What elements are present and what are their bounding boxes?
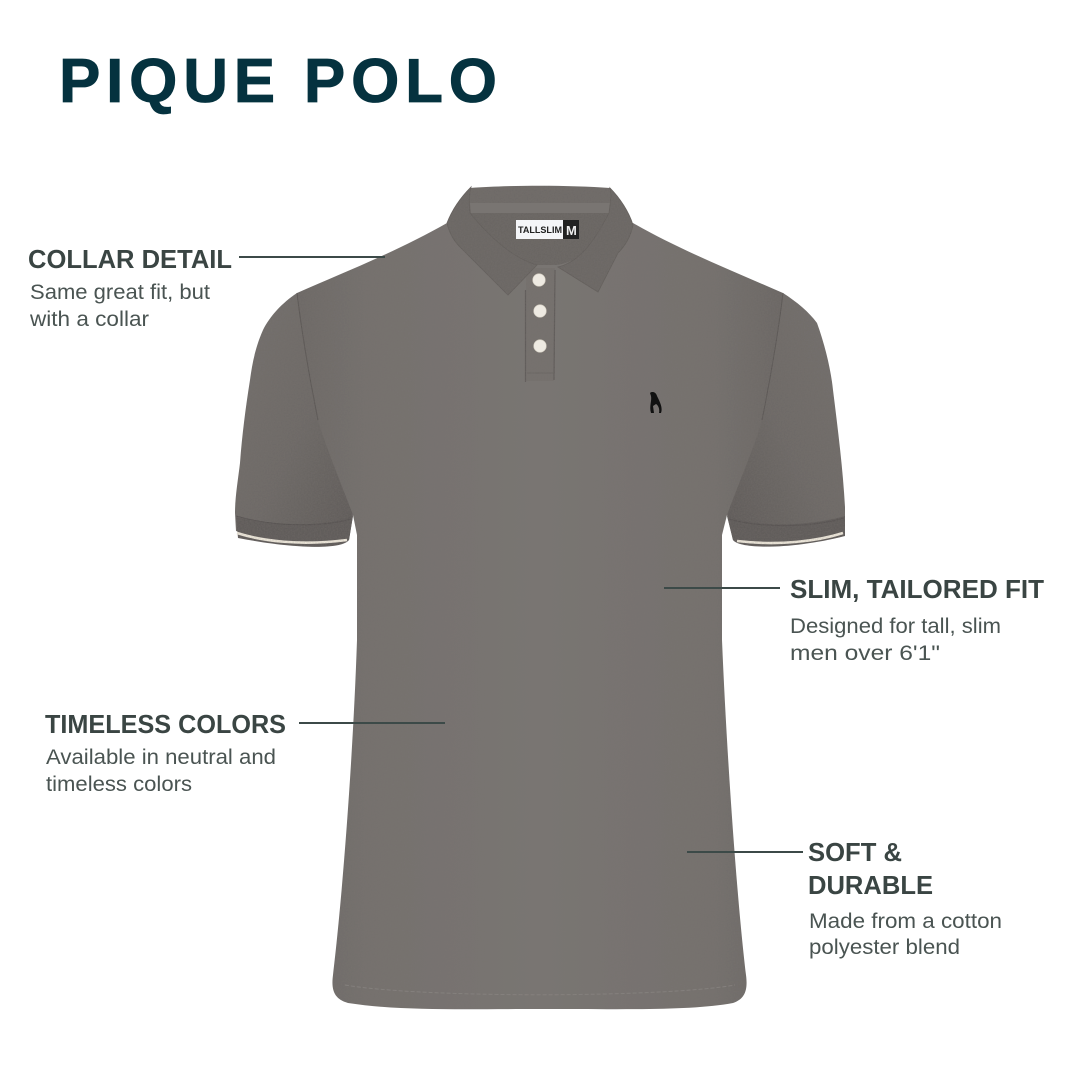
callout: slim, tailored fit: men over 6'1" [790, 641, 940, 665]
callout: collar detail: COLLAR DETAIL [28, 244, 232, 274]
callout: timeless colors: timeless colors [46, 772, 192, 796]
left cuff [236, 516, 353, 547]
shirt body [290, 223, 790, 1009]
brand label: M [566, 223, 577, 238]
sleeve seams [297, 293, 783, 420]
buttons [533, 274, 546, 352]
polo shirt illustration [235, 186, 845, 1009]
collar left leaf [447, 187, 537, 295]
left sleeve [235, 293, 353, 543]
callout: soft and durable: SOFT & [808, 837, 902, 867]
callout: timeless colors: Available in neutral and [46, 745, 276, 769]
hem stitching [345, 985, 735, 995]
callout: soft and durable: DURABLE [808, 870, 933, 900]
callout: soft and durable [687, 837, 1002, 959]
callout: soft and durable: Made from a cotton [809, 909, 1002, 933]
right sleeve [727, 293, 845, 543]
placket [526, 268, 555, 382]
callout: timeless colors: TIMELESS COLORS [45, 709, 286, 739]
fabric [235, 186, 845, 1009]
chest logo [650, 392, 662, 413]
callout: collar detail [28, 244, 385, 331]
callout: collar detail: Same great fit, but [30, 280, 210, 304]
callout: soft and durable: polyester blend [809, 935, 960, 959]
callout: slim, tailored fit [664, 574, 1044, 665]
title: PIQUE POLO [59, 47, 497, 116]
right cuff [727, 516, 845, 547]
callout: timeless colors [45, 709, 445, 796]
callout: slim, tailored fit: SLIM, TAILORED FIT [790, 574, 1044, 604]
callout: slim, tailored fit: Designed for tall, slim [790, 614, 1001, 638]
brand label [516, 220, 579, 239]
back collar and inner neck [468, 186, 622, 265]
brand label: TALLSLIM [518, 225, 562, 236]
collar right leaf [558, 188, 633, 292]
callout: collar detail: with a collar [29, 307, 149, 331]
